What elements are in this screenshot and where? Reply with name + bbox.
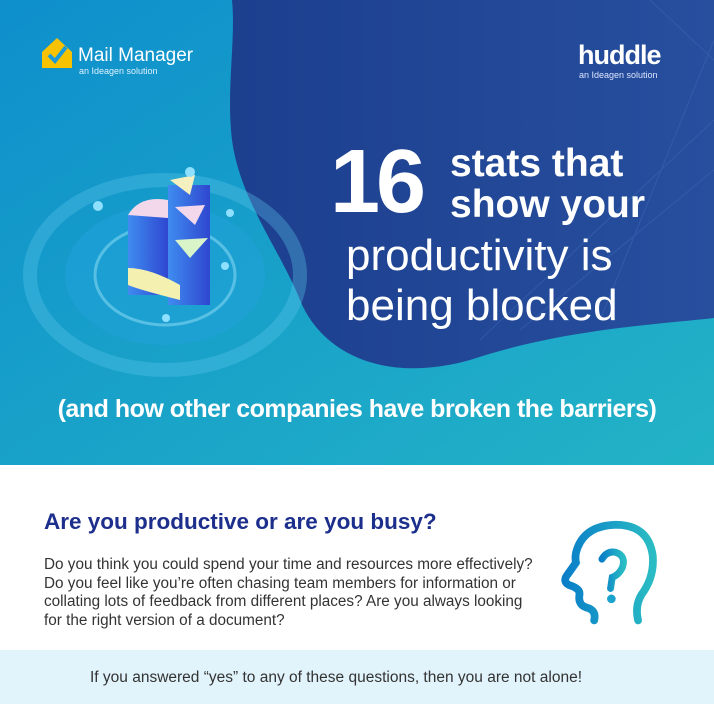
heading: productive or busy: Are you productive or are you busy? (44, 509, 437, 534)
icon: head with question mark (561, 520, 657, 624)
logo: huddle: huddle (578, 40, 660, 70)
panel: header (0, 0, 714, 465)
title: show your (450, 183, 645, 226)
title: stats that (450, 142, 623, 185)
text block: questions: Do you feel like you’re often chasing team members for information or (44, 574, 516, 592)
text block: questions: collating lots of feedback from different places? Are you always looking (44, 593, 522, 610)
text block: questions: for the right version of a document? (44, 612, 285, 628)
subtitle: (and how other companies have broken the barriers) (58, 395, 656, 423)
text block: questions: Do you think you could spend your time and resources more effectively? (44, 556, 533, 573)
title: being blocked (346, 281, 618, 330)
icon: chart illustration (30, 167, 300, 370)
title (330, 132, 645, 330)
title: 16 (330, 132, 422, 232)
title: productivity is (346, 231, 613, 280)
logo: Mail Manager: an Ideagen solution (79, 66, 158, 76)
logo: huddle: an Ideagen solution (579, 70, 658, 80)
logo: Mail Manager (42, 38, 193, 76)
logo: Mail Manager: Mail Manager (78, 45, 193, 66)
callout band: If you answered “yes” to any of these questions, then you are not alone! (90, 669, 582, 686)
callout band (0, 650, 714, 704)
text block: questions (44, 556, 533, 628)
